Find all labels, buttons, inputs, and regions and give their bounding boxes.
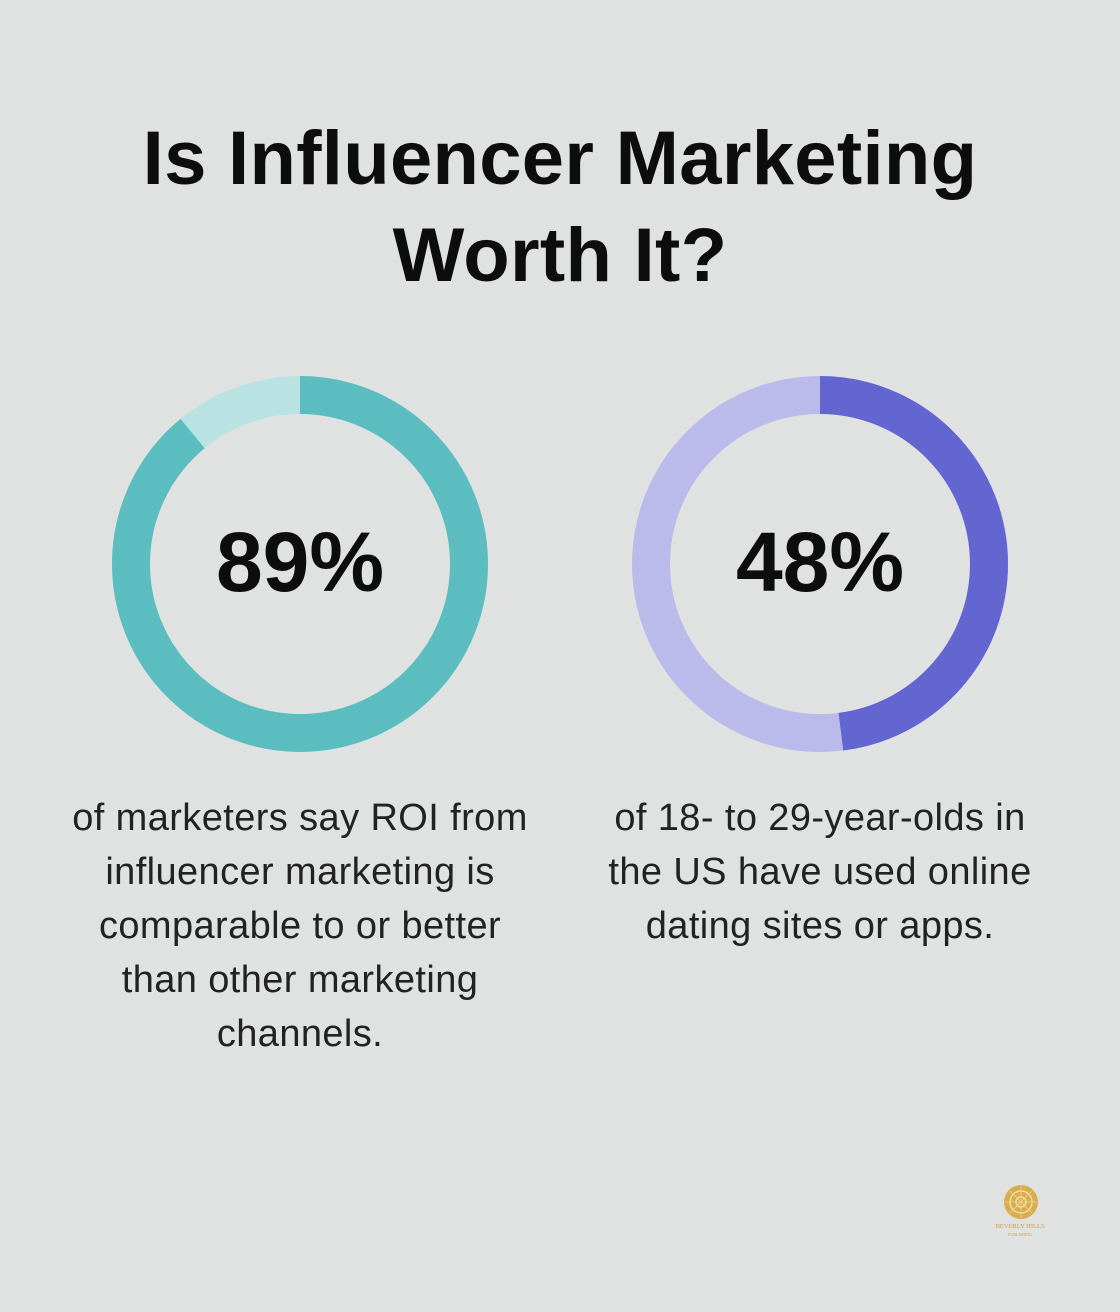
description: 89%: than other marketing <box>122 959 478 1001</box>
description: 89%: influencer marketing is <box>105 851 495 893</box>
description: 89%: comparable to or better <box>99 905 501 947</box>
description: 89%: channels. <box>217 1013 383 1055</box>
description: 48%: dating sites or apps. <box>646 905 994 947</box>
logo text <box>995 1223 1045 1237</box>
description: 89% <box>72 797 528 1055</box>
logo text: BEVERLY HILLS <box>995 1223 1045 1230</box>
title <box>143 116 977 298</box>
description: 48%: the US have used online <box>608 851 1032 893</box>
donut chart: 89% <box>112 376 488 752</box>
stat: 89%: 89% <box>216 515 384 609</box>
description: 48%: of 18- to 29-year-olds in <box>614 797 1026 839</box>
icon: logo emblem <box>1004 1185 1038 1219</box>
stat: 48%: 48% <box>736 515 904 609</box>
description: 48% <box>608 797 1032 947</box>
logo <box>995 1185 1045 1237</box>
logo text: PUBLISHING <box>1008 1232 1032 1237</box>
title: Is Influencer Marketing <box>143 116 977 201</box>
title: Worth It? <box>393 213 727 298</box>
donut chart: 48% <box>632 376 1008 752</box>
description: 89%: of marketers say ROI from <box>72 797 528 839</box>
